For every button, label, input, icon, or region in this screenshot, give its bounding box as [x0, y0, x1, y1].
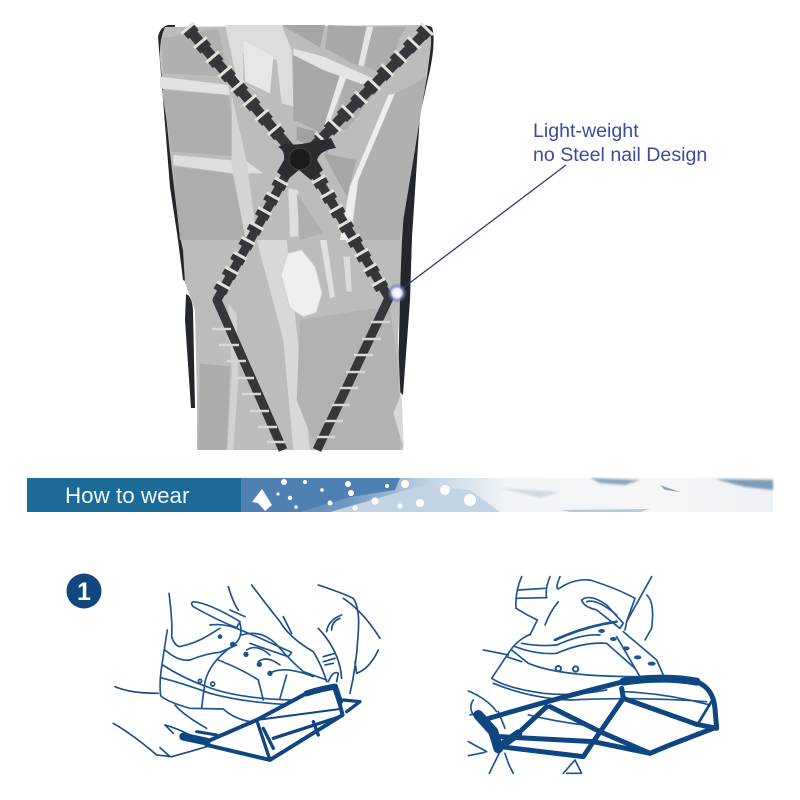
banner snow texture: [241, 478, 773, 512]
sole tread pattern upper: [160, 25, 427, 240]
dark shoe upper edges: [158, 25, 434, 408]
banner snow flecks: [252, 479, 476, 511]
callout: light-weight design: no Steel nail Design: [533, 144, 707, 166]
strap coils lower: [212, 322, 390, 442]
traction cleat frame: [183, 687, 360, 760]
step number badge: 1: [77, 578, 91, 606]
shoe outline and laces: [160, 593, 327, 722]
hands outline: [113, 585, 380, 757]
strap bumps: [187, 27, 428, 295]
grey sole: [160, 25, 431, 450]
white oval logo plate: [281, 250, 322, 317]
traction cleat frame: [478, 678, 717, 757]
callout text: Light-weight: [533, 120, 639, 142]
sole tread pattern lower: [198, 240, 404, 450]
callout: light-weight design: [387, 120, 707, 303]
hands outline: [468, 691, 582, 773]
strap cords: [187, 27, 428, 450]
callout leader line: [403, 165, 566, 288]
banner blue label: [27, 478, 241, 512]
product photo: shoe sole with traction strap: [158, 25, 434, 450]
illustration: hands stretching traction cleat onto shoe: [113, 585, 380, 760]
illustration: cleat fitted over the shoe: [468, 577, 717, 773]
section banner: how to wear: [27, 478, 773, 512]
shoe outline and laces: [483, 577, 710, 728]
step number badge: [66, 574, 102, 608]
strap coils upper: [187, 27, 428, 295]
strap centre hub: [277, 138, 336, 180]
banner heading: How to wear: [65, 483, 190, 508]
callout marker dot: [387, 283, 407, 303]
